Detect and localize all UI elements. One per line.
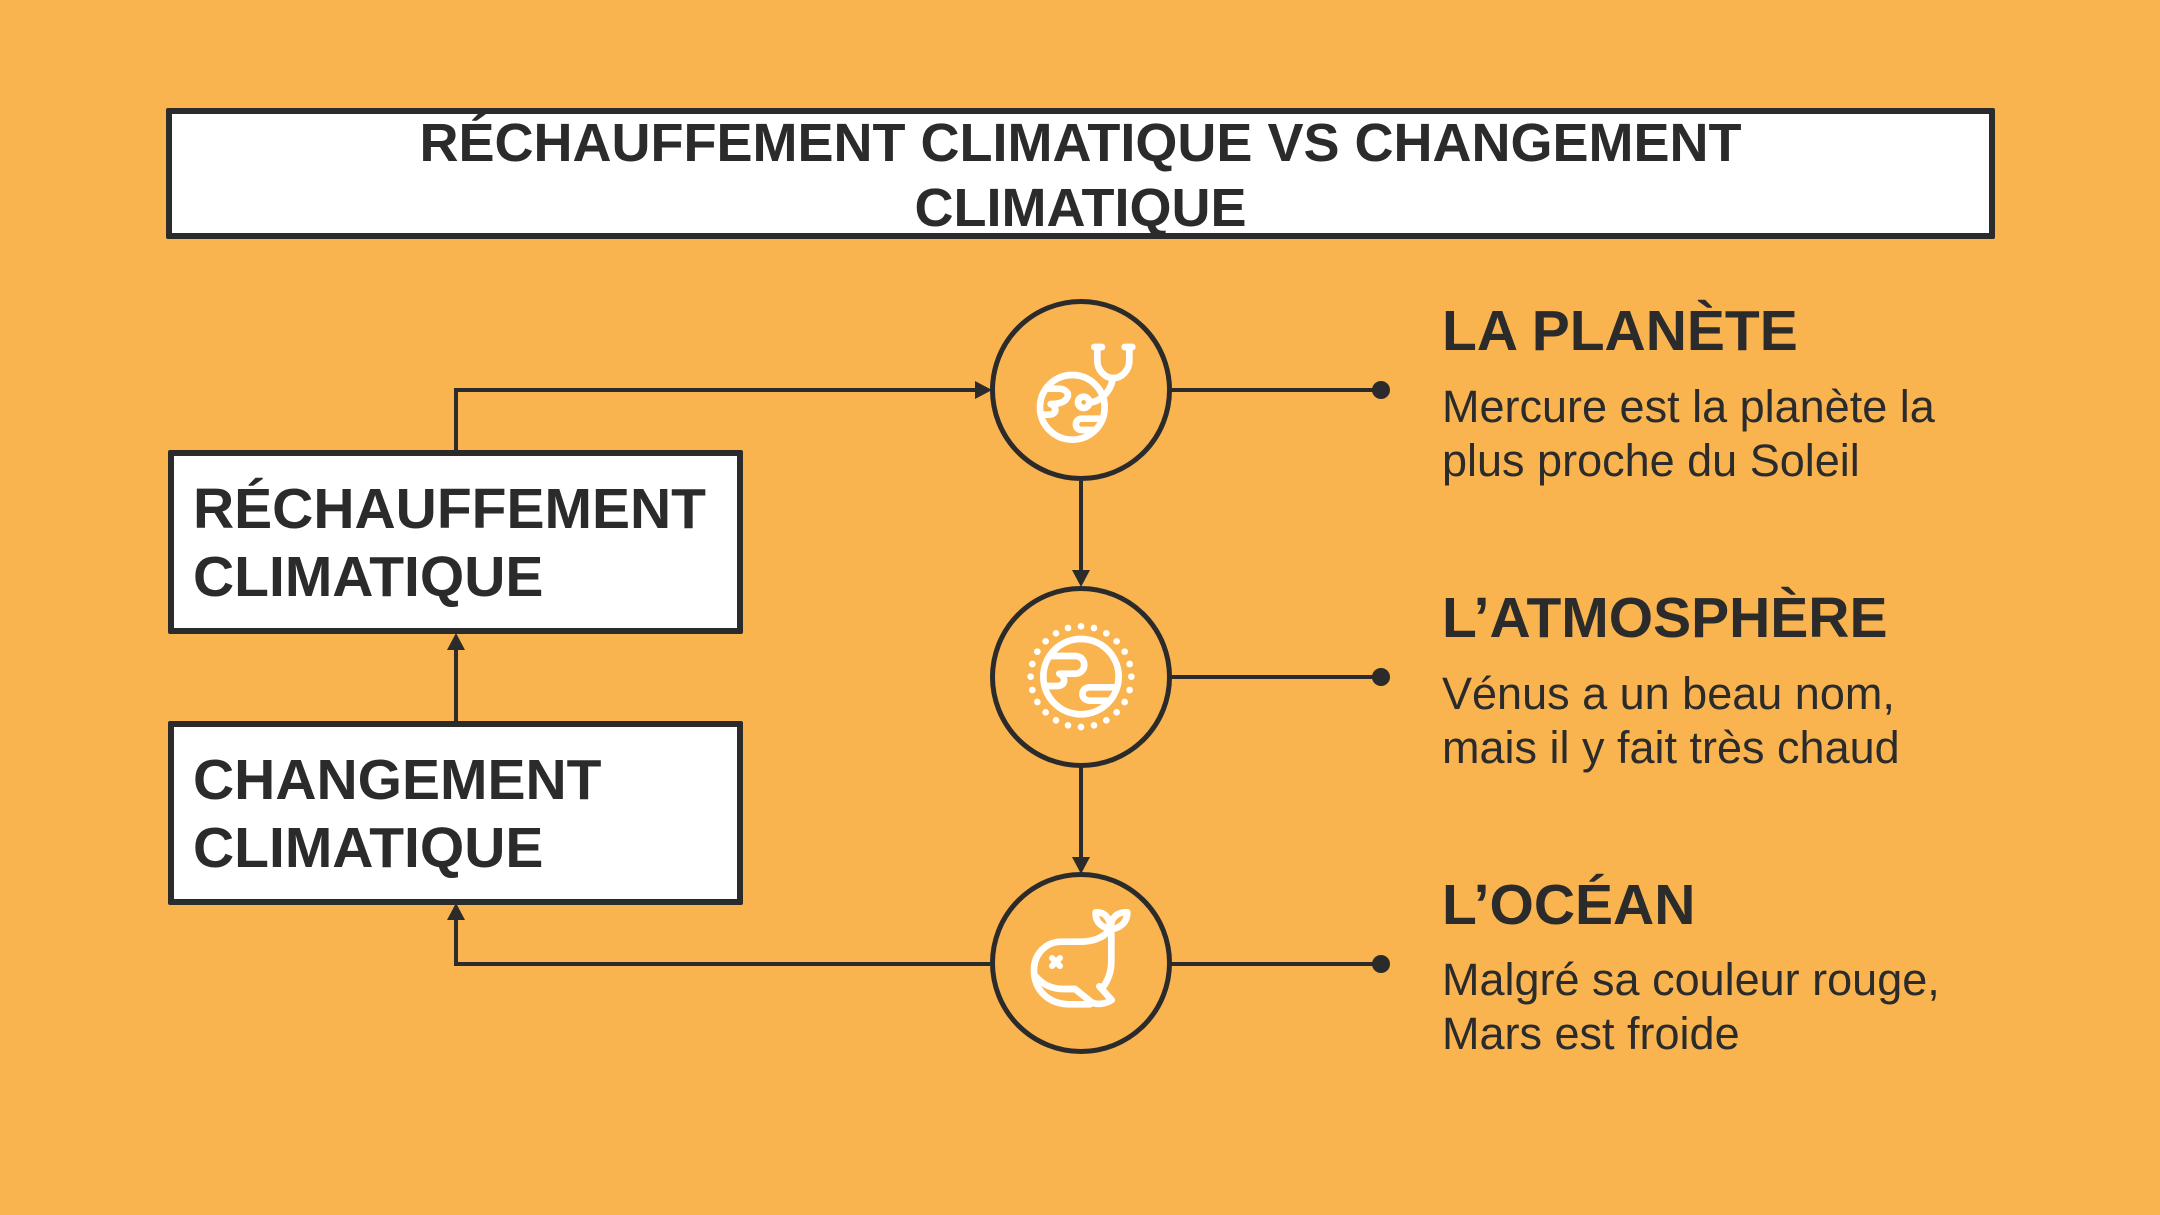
connector: planet to text — [1171, 381, 1390, 399]
heading: l'océan: L’OCÉAN — [1442, 873, 1695, 937]
text: l'océan: Malgré sa couleur rouge, — [1442, 954, 1940, 1005]
box label: changement climatique — [193, 748, 602, 880]
arrow: planet to atmosphere — [1072, 481, 1090, 587]
connector: ocean to text — [1171, 955, 1390, 973]
box label: changement climatique: CHANGEMENT — [193, 748, 602, 812]
connector: atmosphere to text — [1171, 668, 1390, 686]
heading: la planète: LA PLANÈTE — [1442, 299, 1798, 363]
box: réchauffement climatique — [168, 450, 743, 634]
text: la planète: Mercure est la planète la — [1442, 381, 1935, 432]
text: l'océan: Mars est froide — [1442, 1008, 1740, 1059]
box label: réchauffement climatique: RÉCHAUFFEMENT — [193, 477, 706, 541]
text: l'océan — [1442, 954, 1940, 1059]
box label: réchauffement climatique: CLIMATIQUE — [193, 545, 543, 609]
heading: l'atmosphère: L’ATMOSPHÈRE — [1442, 586, 1887, 650]
arrow: atmosphere to ocean — [1072, 767, 1090, 874]
icon: atmosphere — [992, 588, 1170, 766]
box label: réchauffement climatique — [193, 477, 706, 609]
text: l'atmosphère: Vénus a un beau nom, — [1442, 668, 1895, 719]
title — [166, 108, 1995, 239]
arrow: climate change box to warming box — [447, 633, 465, 723]
title: CLIMATIQUE — [915, 178, 1246, 238]
text: la planète — [1442, 381, 1935, 486]
text: l'atmosphère: mais il y fait très chaud — [1442, 722, 1900, 773]
text: l'atmosphère — [1442, 668, 1900, 773]
box label: changement climatique: CLIMATIQUE — [193, 816, 543, 880]
arrow: warming box to planet — [456, 381, 992, 452]
title: RÉCHAUFFEMENT CLIMATIQUE VS CHANGEMENT — [420, 113, 1741, 173]
icon: planet with stethoscope — [992, 302, 1170, 478]
icon: whale — [992, 874, 1170, 1052]
text: la planète: plus proche du Soleil — [1442, 435, 1860, 486]
arrow: ocean to climate change box — [447, 903, 990, 964]
box: changement climatique — [168, 721, 743, 905]
